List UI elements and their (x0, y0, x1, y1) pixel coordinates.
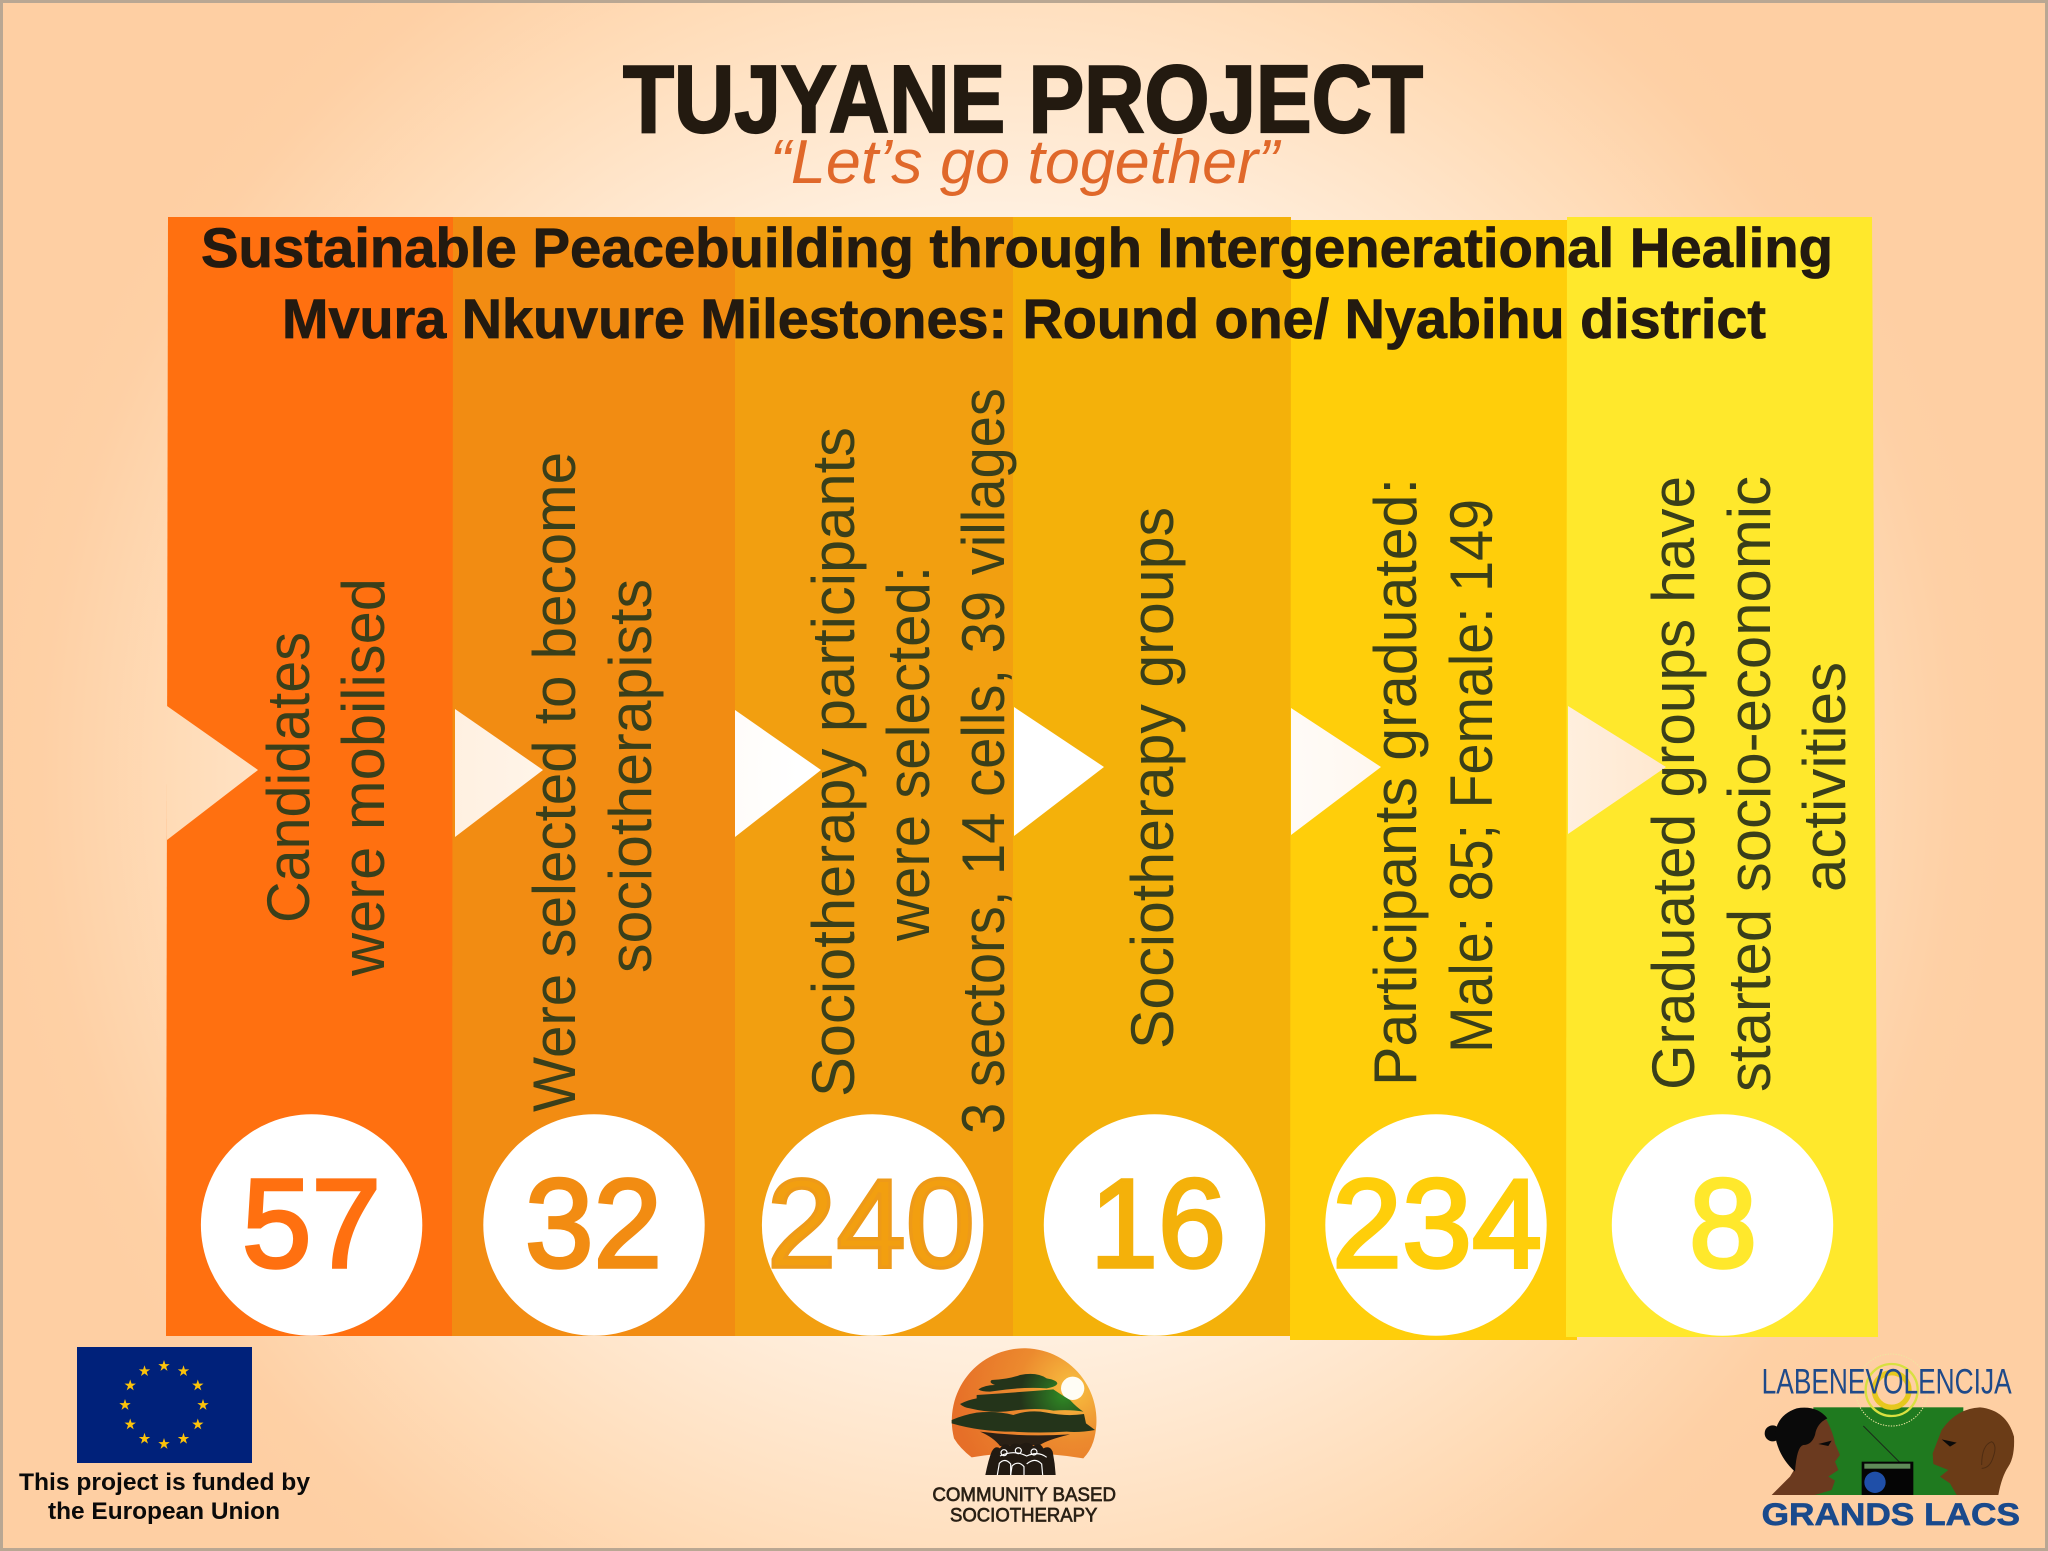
milestone 2 (483, 452, 705, 1336)
milestone 4 (1044, 507, 1265, 1336)
arrow 6 (1568, 706, 1666, 834)
circle 3 (762, 1114, 983, 1336)
funding note: the European Union (48, 1498, 280, 1525)
column 6 (1566, 217, 1878, 1337)
circle 2 (483, 1114, 705, 1336)
funding note (19, 1469, 311, 1525)
column 4 (1013, 217, 1291, 1336)
icon: Community Based Sociotherapy logo: SOCIOTHERAPY (950, 1506, 1097, 1527)
vertical label 6: started socio-economic (1716, 476, 1783, 1092)
vertical label 5 (1362, 478, 1505, 1086)
vertical label 1 (255, 578, 397, 977)
vertical label 3: Sociotherapy participants (800, 427, 867, 1097)
vertical label 6: activities (1791, 662, 1858, 892)
number 8: 8 (1689, 1153, 1757, 1294)
icon: EU flag (77, 1347, 252, 1463)
number 16: 16 (1090, 1153, 1226, 1294)
column 3 (735, 217, 1013, 1336)
milestone 3 (762, 388, 1017, 1336)
heading line 2: Mvura Nkuvure Milestones: Round one/ Nyabihu district (282, 287, 1766, 350)
number 240: 240 (767, 1153, 975, 1294)
funding note: This project is funded by (19, 1469, 311, 1496)
vertical label 6 (1640, 476, 1858, 1092)
vertical label 3: 3 sectors, 14 cells, 39 villages (950, 388, 1017, 1134)
icon: Community Based Sociotherapy logo: COMMUNITY BASED (932, 1485, 1116, 1506)
arrow 5 (1291, 708, 1381, 835)
vertical label 6: Graduated groups have (1640, 476, 1707, 1090)
vertical label 3: were selected: (875, 566, 942, 942)
number 32: 32 (525, 1153, 662, 1294)
vertical label 5: Participants graduated: (1362, 478, 1429, 1086)
vertical label 1: Candidates (255, 632, 322, 923)
number 57: 57 (242, 1153, 381, 1294)
circle 4 (1044, 1114, 1265, 1336)
milestone 1 (201, 578, 422, 1336)
column 2 (452, 217, 735, 1336)
arrow 2 (455, 709, 543, 837)
circle 1 (201, 1114, 422, 1336)
vertical label 2: sociotherapists (597, 579, 664, 973)
title: TUJYANE PROJECT (623, 46, 1423, 153)
icon: La Benevolencija Grands Lacs logo (1762, 1354, 2020, 1532)
arrow 3 (735, 710, 821, 837)
vertical label 1: were mobilised (330, 578, 397, 977)
vertical label 4: Sociotherapy groups (1119, 507, 1186, 1049)
column 5 (1290, 220, 1577, 1340)
column 1 (166, 217, 453, 1336)
arrow 1 (167, 706, 258, 840)
heading line 1: Sustainable Peacebuilding through Intergenerational Healing (201, 216, 1833, 279)
vertical label 2 (521, 452, 664, 1112)
circle 5 (1325, 1114, 1547, 1336)
icon: Community Based Sociotherapy logo (932, 1348, 1116, 1527)
subtitle: “Let’s go together” (770, 128, 1281, 197)
milestone 5 (1325, 478, 1547, 1336)
vertical label 3 (800, 388, 1017, 1134)
vertical label 5: Male: 85; Female: 149 (1438, 499, 1505, 1053)
icon: La Benevolencija Grands Lacs logo: GRANDS LACS (1762, 1497, 2020, 1532)
number 234: 234 (1332, 1153, 1542, 1294)
milestone 6 (1612, 476, 1858, 1336)
panel: coloured milestone columns (166, 217, 1878, 1340)
vertical label 2: Were selected to become (521, 452, 588, 1112)
arrow 4 (1014, 707, 1104, 836)
circle 6 (1612, 1114, 1833, 1336)
